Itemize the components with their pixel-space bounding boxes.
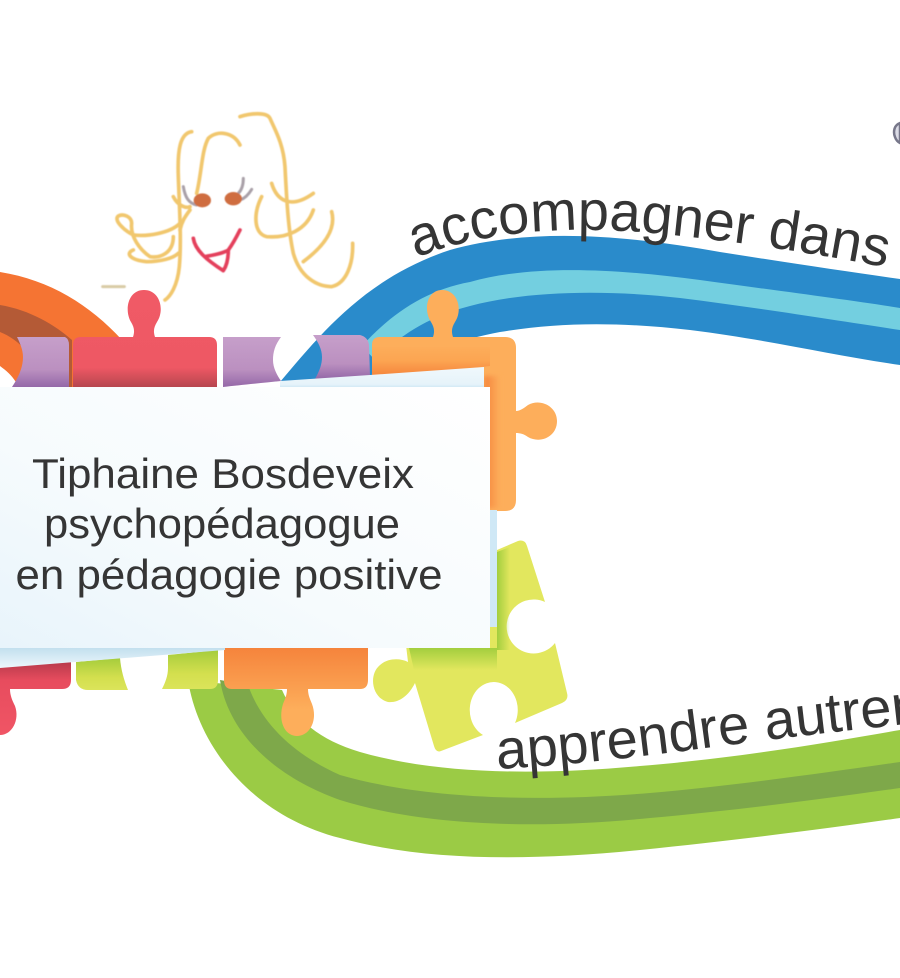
lower orange piece xyxy=(224,648,368,736)
lower lime piece right xyxy=(162,650,218,689)
orange ribbon xyxy=(0,272,122,390)
tilted lime puzzle piece xyxy=(373,541,567,751)
orange puzzle piece xyxy=(372,290,557,511)
card back sheet xyxy=(0,367,497,668)
card text: en pédagogie positive xyxy=(16,551,442,598)
name card xyxy=(0,387,490,648)
card text: psychopédagogue xyxy=(44,500,400,547)
lower puzzle pieces xyxy=(0,648,368,736)
red puzzle piece xyxy=(73,290,217,387)
eyes xyxy=(183,178,252,207)
purple puzzle pieces xyxy=(12,335,370,387)
mouth xyxy=(193,230,240,271)
blue ribbon xyxy=(280,236,900,385)
lower lime piece left xyxy=(76,658,128,690)
lower red piece xyxy=(0,662,71,735)
hair xyxy=(117,114,353,300)
icon fragment top right xyxy=(894,123,900,143)
dash mark xyxy=(103,282,124,291)
card text xyxy=(16,450,442,598)
card text: Tiphaine Bosdeveix xyxy=(32,450,414,497)
green ribbon xyxy=(188,680,900,857)
portrait drawing xyxy=(103,114,353,300)
curved label: accompagner dans: accompagner dans xyxy=(412,200,888,266)
